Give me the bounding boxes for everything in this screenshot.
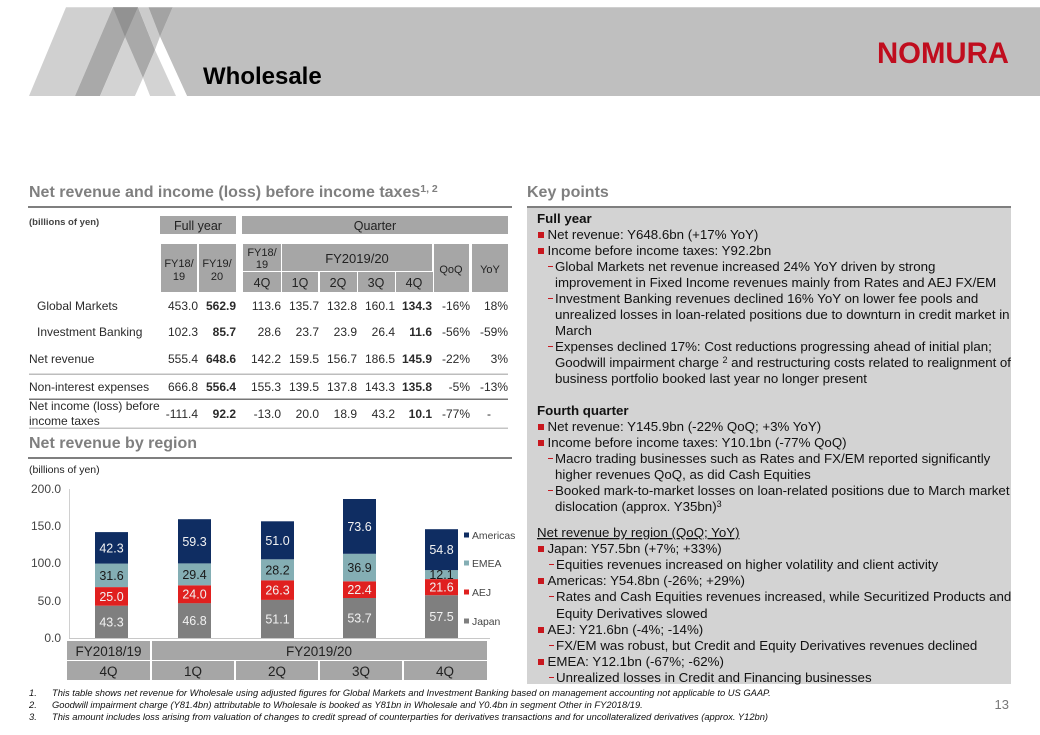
fourth quarter block: higher revenues QoQ, as did Cash Equities (555, 467, 811, 482)
legend: Americas (472, 531, 515, 542)
heading: net revenue by region: Net revenue by region (29, 435, 197, 452)
row: Global Markets: Global Markets (37, 299, 118, 313)
y axis labels: 50.0 (38, 594, 61, 608)
net revenue by region block: Equities revenues increased on higher volatility and client activity (556, 557, 938, 572)
row: Global Markets: 562.9 (206, 299, 236, 313)
y axis labels: 200.0 (31, 482, 61, 496)
y axis labels: 0.0 (44, 631, 61, 645)
full year block: Expenses declined 17%: Cost reductions progressing ahead of initial plan; (555, 339, 992, 354)
footnotes: This amount includes loss arising from valuation of changes to credit spread of counterparties for derivatives transactions and for uncollateralized derivatives (approx. Y12bn) (52, 712, 768, 722)
table header: FY18/ (164, 258, 195, 270)
row: Net revenue: 159.5 (289, 352, 319, 366)
net revenue by region block: AEJ: Y21.6bn (-4%; -14%) (548, 622, 703, 637)
stacked bar chart: net revenue by region (31, 482, 515, 680)
row: Non-interest expenses: 143.3 (365, 380, 395, 394)
full year block: 2 (723, 355, 728, 365)
table header: 20 (211, 271, 223, 283)
row: Global Markets: 160.1 (365, 299, 395, 313)
bar: FY2019/20 3Q: 36.9 (347, 561, 372, 575)
table header: 4Q (406, 276, 423, 290)
bar: FY2018/19 4Q (95, 532, 128, 638)
bar: FY2019/20 3Q: 22.4 (347, 583, 372, 597)
row: Net revenue: 186.5 (365, 352, 395, 366)
row: Non-interest expenses: 135.8 (402, 380, 432, 394)
x axis table: 4Q (436, 664, 454, 679)
bar: FY2018/19 4Q: 31.6 (99, 569, 124, 583)
heading: key points: Key points (527, 184, 609, 201)
row: Non-interest expenses: -5% (449, 380, 470, 394)
full year block: Full year (537, 211, 592, 226)
fourth quarter block: Fourth quarter (537, 403, 629, 418)
bar: FY2019/20 2Q: 26.3 (265, 584, 290, 598)
row: Non-interest expenses: 139.5 (289, 380, 319, 394)
full year block: Net revenue: Y648.6bn (+17% YoY) (548, 227, 758, 242)
row: Non-interest expenses: 137.8 (327, 380, 357, 394)
footnotes: 3. (29, 712, 37, 722)
legend (464, 531, 515, 628)
row: Investment Banking: 23.9 (334, 325, 357, 339)
full year block: March (555, 323, 592, 338)
bar: FY2019/20 3Q (343, 499, 376, 638)
y axis labels: 150.0 (31, 519, 61, 533)
net revenue by region block: FX/EM was robust, but Credit and Equity Derivatives revenues declined (556, 638, 977, 653)
bar: FY2019/20 3Q: 73.6 (347, 520, 372, 534)
row: Investment Banking (37, 325, 508, 339)
bar: FY2018/19 4Q: 43.3 (99, 616, 124, 630)
bar: FY2019/20 4Q (425, 529, 458, 638)
row: Global Markets: 113.6 (252, 299, 281, 313)
y axis labels (31, 482, 61, 645)
table header: 3Q (368, 276, 385, 290)
header banner (29, 7, 1040, 96)
full year block: business portfolio booked last year no longer present (555, 371, 867, 386)
row: Global Markets: 134.3 (402, 299, 432, 313)
unit note: (billions of yen) (29, 217, 99, 228)
row: Investment Banking: -59% (480, 325, 508, 339)
table header: 2Q (330, 276, 347, 290)
table header: QoQ (439, 264, 463, 276)
row: Non-interest expenses: 666.8 (168, 380, 198, 394)
row: Global Markets: -16% (442, 299, 470, 313)
chart unit note: (billions of yen) (29, 464, 100, 476)
row: Net income before income taxes: 18.9 (334, 407, 357, 421)
row: Investment Banking: 85.7 (213, 325, 236, 339)
fourth quarter block: Income before income taxes: Y10.1bn (-77% QoQ) (548, 435, 847, 450)
fourth quarter block: 3 (717, 499, 722, 509)
row: Net income before income taxes: Net income (loss) before (29, 399, 160, 413)
full year block: unrealized losses in loan-related positions due to downturn in credit market in (555, 307, 1010, 322)
row: Net income before income taxes: -111.4 (166, 407, 198, 421)
row: Investment Banking: -56% (442, 325, 470, 339)
y axis labels: 100.0 (31, 556, 61, 570)
table header: 4Q (254, 276, 271, 290)
bar: FY2019/20 1Q (178, 519, 211, 638)
row: Investment Banking: 23.7 (296, 325, 319, 339)
row: Net income before income taxes (29, 399, 491, 428)
bar: FY2019/20 2Q: 28.2 (265, 563, 290, 577)
net revenue by region block: Unrealized losses in Credit and Financing businesses (556, 670, 872, 685)
x axis table: 4Q (99, 664, 118, 679)
full year block: Global Markets net revenue increased 24% YoY driven by strong (555, 259, 935, 274)
row: Net revenue: 156.7 (327, 352, 357, 366)
row: Net revenue: 145.9 (402, 352, 432, 366)
bar: FY2019/20 2Q: 51.1 (265, 612, 290, 626)
net revenue by region block: Japan: Y57.5bn (+7%; +33%) (548, 541, 722, 556)
table header: FY2019/20 (325, 251, 389, 266)
logo: Nomura: NOMURA (877, 37, 1009, 70)
legend: Japan (472, 617, 501, 628)
row: Net income before income taxes: income taxes (29, 414, 100, 428)
x axis table: FY2019/20 (286, 644, 352, 659)
panel: key points (527, 206, 1011, 685)
row: Non-interest expenses (29, 380, 508, 394)
row: Non-interest expenses: -13% (480, 380, 508, 394)
bar: FY2019/20 1Q: 29.4 (182, 568, 207, 582)
x axis table: FY2018/19 (75, 644, 142, 659)
net revenue by region block (537, 525, 1011, 685)
row: Net income before income taxes: -13.0 (254, 407, 281, 421)
row: Net income before income taxes: - (487, 407, 491, 421)
fourth quarter block: dislocation (approx. Y35bn) (555, 499, 717, 514)
footnotes: This table shows net revenue for Wholesale using adjusted figures for Global Markets and Investment Banking based on management accounting not applicable to US GAAP. (52, 688, 771, 698)
table header: 19 (173, 271, 185, 283)
full year block: improvement in Fixed Income revenues mainly from Rates and AEJ FX/EM (555, 275, 996, 290)
bar: FY2019/20 1Q: 46.8 (182, 614, 207, 628)
row: Net income before income taxes: 92.2 (213, 407, 236, 421)
bar: FY2019/20 4Q: 54.8 (429, 543, 454, 557)
table header: 19 (256, 259, 268, 271)
row: Global Markets (37, 299, 508, 313)
row: Non-interest expenses: Non-interest expenses (29, 380, 149, 394)
row: Global Markets: 18% (484, 299, 508, 313)
full year block: Goodwill impairment charge (555, 355, 719, 370)
bar: FY2019/20 2Q: 51.0 (265, 534, 290, 548)
net revenue by region block: EMEA: Y12.1bn (-67%; -62%) (548, 654, 724, 669)
fourth quarter block: Macro trading businesses such as Rates and FX/EM reported significantly (555, 451, 991, 466)
row: Net income before income taxes: -77% (442, 407, 470, 421)
footnotes: 1. (29, 688, 37, 698)
bar: FY2018/19 4Q: 25.0 (99, 590, 124, 604)
fourth quarter block: Net revenue: Y145.9bn (-22% QoQ; +3% YoY) (548, 419, 821, 434)
legend: AEJ (472, 588, 491, 599)
table header: FY19/ (202, 258, 233, 270)
table header: YoY (480, 264, 501, 276)
footnotes (28, 688, 771, 722)
full year block: Income before income taxes: Y92.2bn (548, 243, 771, 258)
bar: FY2018/19 4Q: 42.3 (99, 542, 124, 556)
row: Net income before income taxes: 43.2 (372, 407, 395, 421)
table header: Full year (174, 219, 222, 233)
row: Investment Banking: 11.6 (409, 325, 432, 339)
bar: FY2019/20 3Q: 53.7 (347, 612, 372, 626)
net revenue by region block: Equity Derivatives slowed (556, 606, 708, 621)
page number: 13 (995, 697, 1009, 712)
bar: FY2019/20 4Q: 21.6 (429, 581, 454, 595)
row: Global Markets: 132.8 (327, 299, 357, 313)
footnotes: Goodwill impairment charge (Y81.4bn) attributable to Wholesale is booked as Y81bn in Wholesale and Y0.4bn in segment Other in FY2018/19. (52, 700, 643, 710)
heading: net revenue and income: 1, 2 (420, 183, 438, 195)
fourth quarter block: Booked mark-to-market losses on loan-related positions due to March market (555, 483, 1010, 498)
table header (160, 216, 508, 292)
title: Wholesale (203, 63, 322, 90)
row: Non-interest expenses: 556.4 (206, 380, 236, 394)
net revenue by region block: Rates and Cash Equities revenues increased, while Securitized Products and (556, 589, 1011, 604)
full year block: Investment Banking revenues declined 16% YoY on lower fee pools and (555, 291, 978, 306)
row: Investment Banking: Investment Banking (37, 325, 142, 339)
row: Net revenue: 3% (491, 352, 508, 366)
table: net revenue and income (29, 216, 508, 429)
row: Net revenue (29, 352, 508, 366)
row: Net revenue: 555.4 (168, 352, 198, 366)
row: Investment Banking: 28.6 (258, 325, 281, 339)
row: Investment Banking: 102.3 (168, 325, 198, 339)
bar: FY2019/20 2Q (261, 521, 294, 638)
bar: FY2019/20 1Q: 24.0 (182, 588, 207, 602)
heading rule: table (28, 206, 512, 208)
row: Non-interest expenses: 155.3 (251, 380, 281, 394)
row: Net revenue: Net revenue (29, 352, 95, 366)
x axis table: 3Q (352, 664, 370, 679)
legend: EMEA (472, 559, 502, 570)
footnotes: 2. (28, 700, 37, 710)
net revenue by region block: Net revenue by region (QoQ; YoY) (537, 525, 740, 540)
row: Global Markets: 135.7 (289, 299, 319, 313)
row: Net income before income taxes: 20.0 (296, 407, 319, 421)
row: Net revenue: -22% (442, 352, 470, 366)
bar: FY2019/20 4Q: 12.1 (429, 568, 454, 582)
table header: Quarter (354, 219, 396, 233)
heading: net revenue and income: Net revenue and income (loss) before income taxes (29, 184, 420, 201)
row: Investment Banking: 26.4 (372, 325, 395, 339)
table header: FY18/ (247, 247, 278, 259)
x axis table: 1Q (184, 664, 202, 679)
row: Net revenue: 142.2 (251, 352, 281, 366)
bar: FY2019/20 1Q: 59.3 (182, 535, 207, 549)
table header: 1Q (292, 276, 309, 290)
row: Global Markets: 453.0 (168, 299, 198, 313)
row: Net income before income taxes: 10.1 (409, 407, 432, 421)
row: Net revenue: 648.6 (206, 352, 236, 366)
bar: FY2019/20 4Q: 57.5 (429, 610, 454, 624)
x axis table: 2Q (268, 664, 286, 679)
heading rule: chart (28, 457, 512, 459)
fourth quarter block (537, 403, 1010, 514)
x axis table (67, 641, 487, 680)
full year block (537, 211, 1011, 386)
net revenue by region block: Americas: Y54.8bn (-26%; +29%) (548, 573, 745, 588)
full year block: and restructuring costs related to realignment of (727, 355, 1011, 370)
